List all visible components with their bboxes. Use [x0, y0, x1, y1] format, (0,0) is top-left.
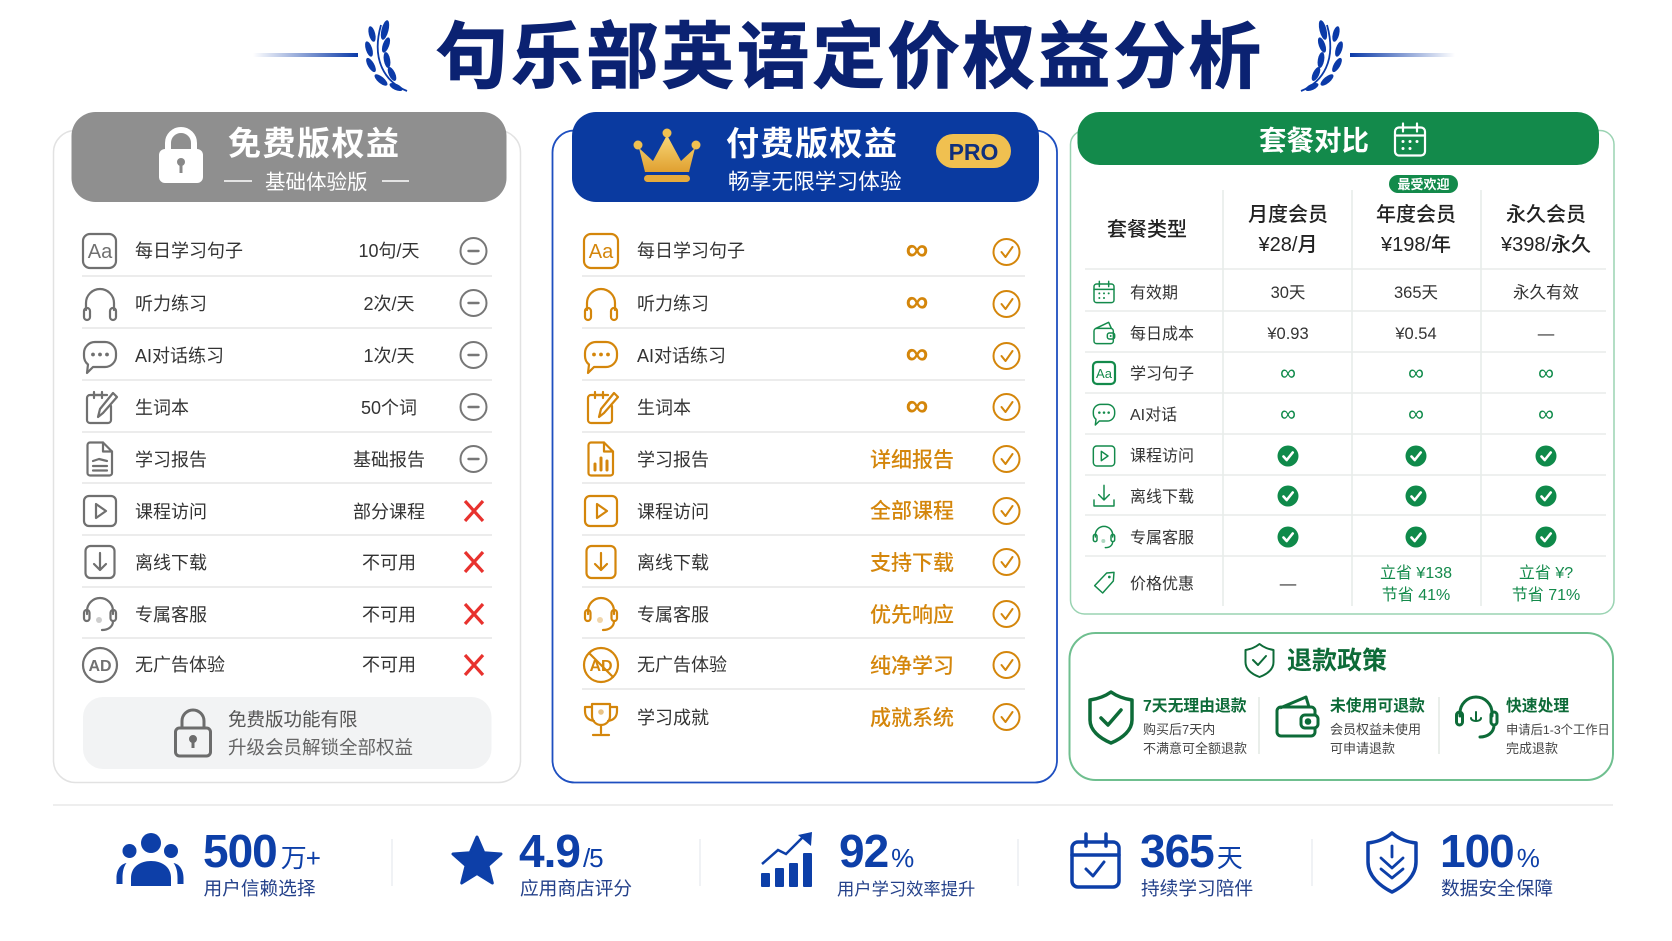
row: 生词本 [588, 387, 1020, 423]
figure: 4.9/5 [519, 825, 603, 877]
heading: 退款政策 [1287, 647, 1387, 675]
caption: 用户信赖选择 [204, 878, 316, 899]
heading: 免费版权益 [228, 125, 400, 162]
icon: calendar [1395, 124, 1425, 156]
notice text: 免费版功能有限 [228, 709, 358, 730]
stat: users [116, 825, 320, 899]
row: 无广告体验: 无广告体验 [135, 655, 225, 675]
row: 有效期: 有效期 [1130, 284, 1178, 302]
badge: most popular: 最受欢迎 [1397, 177, 1450, 192]
row: 生词本: 生词本 [135, 398, 189, 418]
row: 价格优惠: 立省 ¥? [1519, 564, 1573, 582]
row: AI对话: AI对话 [1130, 406, 1177, 424]
row: 课程访问 [585, 496, 1020, 526]
item text: 未使用可退款 [1330, 697, 1425, 715]
row: 生词本: 生词本 [637, 398, 691, 418]
row: 生词本: 50个词 [361, 398, 417, 418]
stat: efficiency [761, 825, 975, 899]
row: 学习句子: ∞ [1408, 360, 1424, 385]
panel: free plan [54, 112, 520, 782]
row: 有效期: 30天 [1271, 284, 1305, 302]
row: 有效期: 365天 [1394, 284, 1438, 302]
row: 学习成就: 学习成就 [637, 708, 709, 728]
item: 快速处理 [1456, 697, 1610, 756]
row: 听力练习: 听力练习 [637, 294, 709, 314]
comparison header [1078, 112, 1599, 165]
row: 专属客服: 专属客服 [1130, 529, 1194, 547]
row: 学习句子: 学习句子 [1130, 365, 1194, 383]
row: AI对话练习: 1次/天 [363, 346, 415, 366]
row: 课程访问: 部分课程 [353, 502, 425, 522]
item text: 购买后7天内 [1143, 722, 1215, 737]
row: 价格优惠: 立省 ¥138 [1380, 564, 1452, 582]
row: 每日成本: 每日成本 [1130, 325, 1194, 343]
row: 离线下载: 离线下载 [1130, 488, 1194, 506]
item text [1506, 697, 1610, 756]
row: 专属客服: 专属客服 [135, 605, 207, 625]
panel: refund policy [1070, 633, 1613, 780]
stat: days [1072, 825, 1253, 899]
row: 每日成本: — [1538, 325, 1555, 343]
row: 听力练习: ∞ [906, 283, 928, 319]
row: 课程访问 [1093, 446, 1556, 466]
row: 每日学习句子: Aa [88, 241, 113, 263]
title: 句乐部英语定价权益分析 [436, 18, 1264, 98]
table header row: 永久会员 [1506, 203, 1586, 226]
row: AI对话: ∞ [1538, 401, 1554, 426]
row: 价格优惠: 价格优惠 [1130, 575, 1194, 593]
item text: 7天无理由退款 [1143, 697, 1247, 715]
row: 学习报告 [88, 442, 486, 476]
row: 学习句子 [1093, 360, 1554, 385]
row: 价格优惠 [1095, 564, 1580, 604]
row: 课程访问: 全部课程 [870, 500, 954, 523]
notice text [228, 709, 413, 758]
icon: rising chart [761, 832, 812, 887]
row: 学习报告 [588, 442, 1020, 476]
row: 无广告体验 [584, 648, 1020, 682]
row: 生词本: ∞ [906, 387, 928, 423]
item text: 申请后1-3个工作日 [1506, 723, 1610, 737]
icon: shield check [1090, 692, 1132, 743]
ornament: right laurel and line [1301, 19, 1455, 93]
row: AI对话 [1093, 401, 1554, 426]
row: 离线下载 [86, 546, 483, 578]
row: AI对话练习 [84, 342, 486, 373]
row: 学习句子: Aa [1096, 366, 1113, 381]
PRO badge: PRO [949, 139, 998, 165]
row: 无广告体验 [83, 648, 483, 682]
item text: 会员权益未使用 [1330, 722, 1421, 737]
row: AI对话练习: ∞ [906, 335, 928, 371]
table header row [1107, 203, 1591, 256]
caption: 数据安全保障 [1441, 878, 1553, 899]
table header row: 年度会员 [1376, 203, 1456, 226]
icon: shield [1368, 833, 1416, 892]
stat: rating [453, 825, 632, 899]
row: 离线下载 [586, 546, 1020, 578]
row: 听力练习 [84, 289, 486, 320]
row: 课程访问 [84, 496, 483, 526]
row: 专属客服 [1093, 526, 1556, 548]
row: 每日成本: ¥0.93 [1266, 325, 1309, 343]
caption: 持续学习陪伴 [1141, 878, 1253, 899]
caption: 应用商店评分 [520, 878, 632, 899]
row: 学习报告: 学习报告 [135, 450, 207, 470]
icon: small lock [176, 710, 210, 756]
row: AI对话练习: AI对话练习 [637, 346, 726, 366]
row: 离线下载 [1094, 485, 1556, 506]
row: 每日学习句子 [83, 234, 486, 268]
badge: most popular [1389, 175, 1458, 193]
row: 每日学习句子 [584, 231, 1020, 268]
row: 无广告体验: 无广告体验 [637, 655, 727, 675]
row: 离线下载: 支持下载 [870, 552, 954, 575]
panel: plan comparison [1070, 112, 1614, 614]
subheading: 畅享无限学习体验 [728, 169, 902, 194]
row: 听力练习: 听力练习 [135, 294, 207, 314]
row: 学习成就 [585, 704, 1020, 735]
item text [1330, 697, 1425, 756]
panel: paid plan [552, 112, 1057, 782]
row: 无广告体验: AD [88, 658, 112, 675]
row: AI对话练习 [585, 335, 1020, 373]
heading: 付费版权益 [726, 125, 898, 162]
table header row: 套餐类型 [1107, 218, 1187, 241]
icon: calendar check [1072, 834, 1119, 887]
row: 无广告体验: AD [589, 658, 613, 675]
PRO badge [936, 134, 1011, 168]
row: 专属客服 [585, 598, 1020, 630]
figure: 365天 [1140, 825, 1243, 877]
row: 离线下载: 离线下载 [637, 553, 709, 573]
row: 有效期: 永久有效 [1513, 283, 1579, 302]
item text: 快速处理 [1506, 697, 1569, 715]
item text: 完成退款 [1506, 741, 1558, 756]
figure: 100% [1440, 825, 1540, 877]
row: 每日学习句子: 10句/天 [358, 241, 420, 261]
row: 离线下载: 离线下载 [135, 553, 207, 573]
row: 听力练习 [585, 283, 1020, 320]
row: 离线下载: 不可用 [362, 553, 416, 573]
row: 学习句子: ∞ [1538, 360, 1554, 385]
icon: gold crown [634, 128, 700, 182]
row: 价格优惠: 节省 71% [1512, 586, 1580, 604]
row: 每日学习句子: Aa [589, 241, 614, 263]
row: 无广告体验: 纯净学习 [870, 655, 954, 678]
item: 未使用可退款 [1277, 697, 1425, 756]
row: 学习报告: 基础报告 [353, 450, 425, 470]
row: 专属客服 [84, 598, 483, 630]
row: 每日成本 [1094, 322, 1555, 344]
row: 学习报告: 详细报告 [870, 449, 954, 472]
row: 每日学习句子: 每日学习句子 [637, 241, 745, 261]
table header row: ¥398/永久 [1500, 233, 1591, 256]
row: AI对话练习: AI对话练习 [135, 346, 224, 366]
row: 专属客服: 优先响应 [870, 604, 954, 627]
row: 价格优惠: 节省 41% [1382, 586, 1450, 604]
row: AI对话: ∞ [1280, 401, 1296, 426]
table header row: 月度会员 [1248, 203, 1328, 226]
upgrade notice [83, 697, 492, 769]
row: AI对话: ∞ [1408, 401, 1424, 426]
row: 听力练习: 2次/天 [363, 294, 415, 314]
row: 每日学习句子: ∞ [906, 231, 928, 267]
row: 每日成本: ¥0.54 [1394, 325, 1437, 343]
row: 专属客服: 专属客服 [637, 605, 709, 625]
ornament: left laurel and line [253, 19, 407, 93]
caption: 用户学习效率提升 [837, 879, 975, 899]
item: 7天无理由退款 [1090, 692, 1247, 756]
row: 课程访问: 课程访问 [637, 502, 709, 522]
table header row: ¥198/年 [1380, 233, 1451, 256]
stat: data security [1368, 825, 1553, 899]
item text [1143, 697, 1247, 756]
icon: wallet [1277, 697, 1318, 736]
heading: 套餐对比 [1259, 125, 1369, 156]
row: 生词本 [87, 392, 486, 423]
icon: white lock [159, 130, 203, 183]
row: 课程访问: 课程访问 [135, 502, 207, 522]
row: 学习句子: ∞ [1280, 360, 1296, 385]
row: 每日学习句子: 每日学习句子 [135, 241, 243, 261]
row: 有效期 [1094, 281, 1579, 303]
item text: 不满意可全额退款 [1143, 741, 1247, 756]
figure: 500万+ [203, 825, 320, 877]
subheading: 基础体验版 [265, 171, 368, 194]
item text: 可申请退款 [1330, 741, 1395, 756]
notice text: 升级会员解锁全部权益 [228, 737, 413, 758]
row: 学习报告: 学习报告 [637, 450, 709, 470]
row: 课程访问: 课程访问 [1130, 447, 1194, 465]
icon: small shield [1246, 644, 1274, 677]
row: 价格优惠: — [1280, 575, 1297, 593]
row: 专属客服: 不可用 [362, 605, 416, 625]
row: 学习成就: 成就系统 [870, 707, 954, 730]
figure: 92% [839, 825, 914, 877]
icon: users [116, 833, 184, 886]
icon: star [453, 837, 501, 883]
icon: headset [1456, 697, 1497, 737]
table header row: ¥28/月 [1258, 234, 1317, 256]
paid plan header [572, 112, 1039, 202]
row: 无广告体验: 不可用 [362, 655, 416, 675]
free plan header [72, 112, 506, 202]
